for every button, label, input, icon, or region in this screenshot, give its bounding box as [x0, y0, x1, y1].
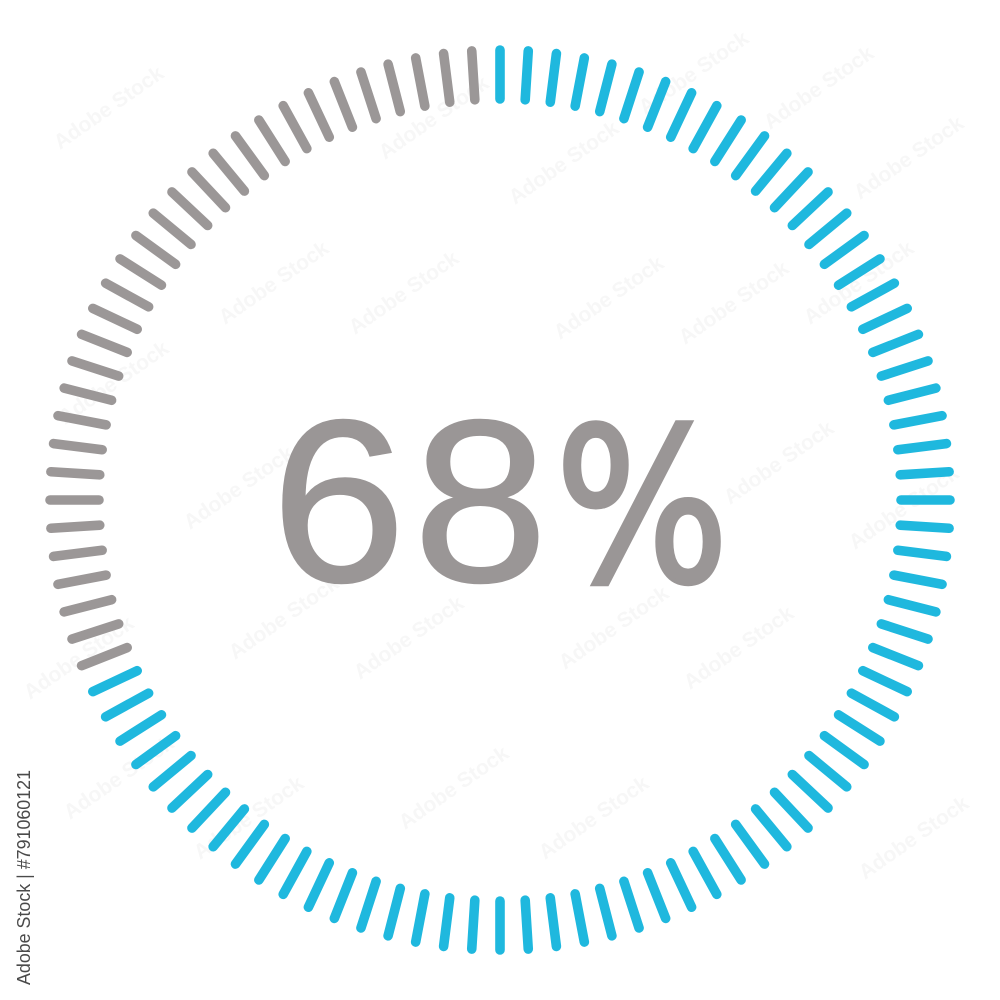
- radial progress infographic: Adobe Stock: [180, 441, 298, 534]
- radial progress infographic: Adobe Stock: [850, 111, 968, 204]
- radial progress infographic: Adobe Stock: [350, 591, 468, 684]
- radial progress infographic: Adobe Stock: [190, 771, 308, 864]
- radial progress infographic: Adobe Stock: [720, 416, 838, 509]
- radial progress infographic: Adobe Stock: [345, 246, 463, 339]
- percentage value: [271, 373, 729, 631]
- radial progress infographic: Adobe Stock: [50, 61, 168, 154]
- radial progress infographic: Adobe Stock: [635, 26, 753, 119]
- radial progress infographic: Adobe Stock: [855, 791, 973, 884]
- blue progress ticks (68%): [93, 50, 950, 950]
- radial progress infographic: Adobe Stock: [215, 236, 333, 329]
- radial progress infographic: Adobe Stock: [680, 601, 798, 694]
- percentage value: 8: [413, 373, 548, 631]
- radial progress infographic: Adobe Stock: [760, 41, 878, 134]
- radial progress infographic: Adobe Stock: [535, 771, 653, 864]
- radial progress infographic: Adobe Stock: [505, 116, 623, 209]
- radial progress infographic: Adobe Stock: [60, 731, 178, 824]
- percentage value: %: [555, 382, 729, 631]
- radial progress infographic: Adobe Stock: [55, 336, 173, 429]
- radial progress infographic: Adobe Stock: [845, 461, 963, 554]
- radial progress infographic: Adobe Stock: [395, 741, 513, 834]
- radial progress infographic: Adobe Stock: [555, 581, 673, 674]
- grey remaining ticks: [50, 51, 475, 666]
- radial progress infographic: Adobe Stock: [675, 256, 793, 349]
- radial progress infographic: Adobe Stock: [800, 236, 918, 329]
- stock image id label: Adobe Stock | #791060121: [14, 770, 34, 985]
- percentage value: 6: [271, 373, 406, 631]
- radial progress infographic: Adobe Stock: [375, 71, 493, 164]
- radial progress infographic: Adobe Stock: [550, 251, 668, 344]
- radial progress infographic: Adobe Stock: [20, 611, 138, 704]
- radial progress infographic: Adobe Stock: [225, 571, 343, 664]
